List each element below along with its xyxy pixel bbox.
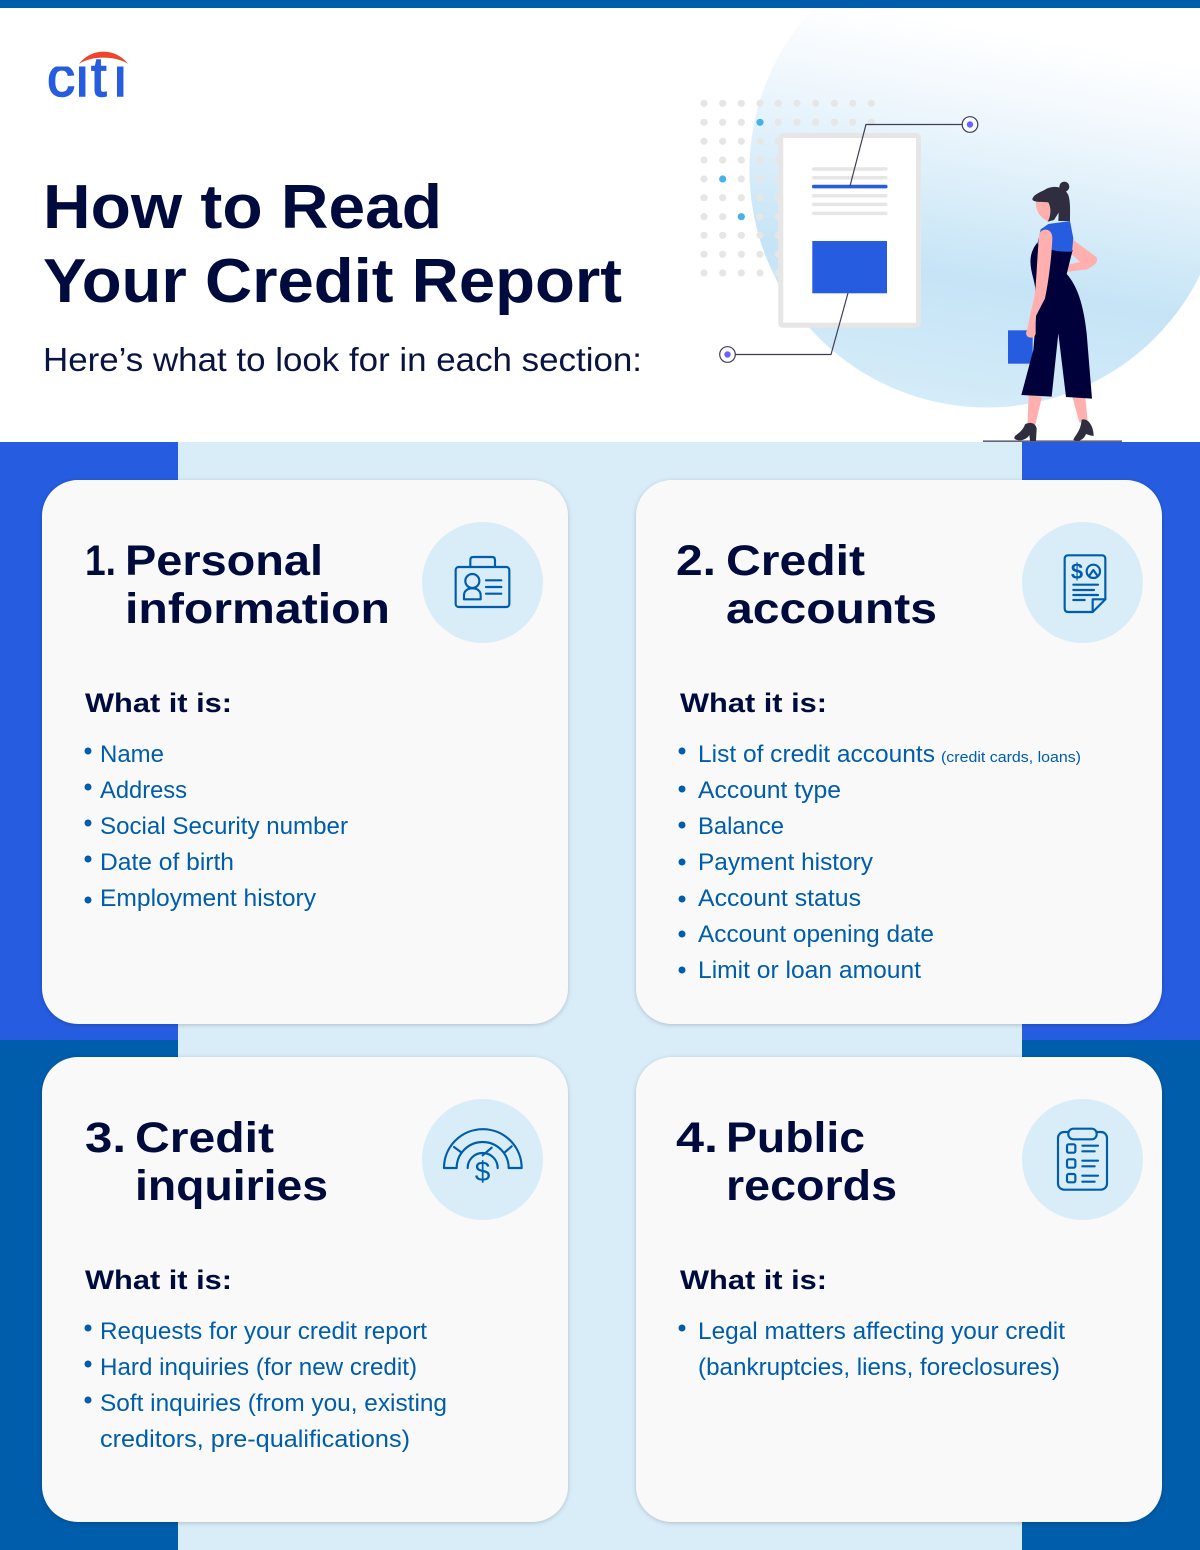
list: credit inquiry items: Requests for your credit report (100, 1318, 427, 1345)
panel: public records (636, 1057, 1162, 1522)
list: credit inquiry items: Soft inquiries (from you, existing (100, 1390, 447, 1417)
list: public record items (678, 1318, 1065, 1381)
list: credit account items: Account opening date (698, 921, 934, 948)
list: personal information items (84, 741, 348, 912)
list: public record items: (bankruptcies, liens, foreclosures) (698, 1354, 1060, 1381)
subheading: What it is: (680, 688, 827, 718)
list: credit inquiry items (84, 1318, 447, 1453)
illustration: woman reading report (700, 0, 1200, 442)
list: personal information items: Date of birth (100, 849, 234, 876)
woman (1008, 182, 1097, 441)
subheading: What it is: (85, 688, 232, 718)
list: credit account items: Balance (698, 813, 784, 840)
list: credit account items: List of credit accounts (698, 741, 935, 768)
subheading: What it is: (680, 1265, 827, 1295)
heading: credit accounts (676, 537, 937, 633)
background bands (0, 442, 1200, 1550)
heading: credit inquiries: 3. (85, 1114, 126, 1162)
panel: credit inquiries (42, 1057, 568, 1522)
heading: personal information: information (125, 585, 390, 633)
list: credit account items: (credit cards, loans) (941, 749, 1081, 766)
logo: citi: citi (47, 45, 126, 108)
heading: credit inquiries (85, 1114, 328, 1210)
list: credit account items: Limit or loan amount (698, 957, 921, 984)
heading: personal information: Personal (125, 537, 323, 585)
title: How to Read (43, 173, 442, 242)
list: credit account items: Account status (698, 885, 861, 912)
icon: id badge (422, 522, 543, 643)
list: personal information items: Employment history (100, 885, 317, 912)
heading: credit inquiries: Credit (135, 1114, 274, 1162)
panel: credit accounts (636, 480, 1162, 1024)
connectors (720, 117, 978, 362)
title (43, 173, 622, 316)
list: credit inquiry items: Hard inquiries (for new credit) (100, 1354, 417, 1381)
list: personal information items: Name (100, 741, 164, 768)
subheading: What it is: (85, 1265, 232, 1295)
list: public record items: Legal matters affecting your credit (698, 1318, 1065, 1345)
background circle (750, 0, 1200, 408)
heading: public records: 4. (676, 1114, 718, 1162)
heading: public records: records (726, 1162, 897, 1210)
top bar (0, 0, 1200, 8)
heading: personal information (85, 537, 390, 633)
dot grid (700, 100, 875, 277)
heading: credit accounts: 2. (676, 537, 716, 585)
icon: credit gauge: $ (475, 1156, 491, 1187)
heading: public records (676, 1114, 897, 1210)
title: Your Credit Report (43, 247, 622, 316)
icon: clipboard (1022, 1099, 1143, 1220)
list: credit inquiry items: creditors, pre-qualifications) (100, 1426, 410, 1453)
ground line (983, 440, 1122, 442)
document (781, 136, 918, 325)
list: personal information items: Address (100, 777, 187, 804)
heading: credit accounts: Credit (726, 537, 865, 585)
list: credit account items: Payment history (698, 849, 874, 876)
panel: personal information (42, 480, 568, 1024)
icon: credit gauge (422, 1099, 543, 1220)
heading: personal information: 1. (85, 537, 116, 585)
heading: public records: Public (726, 1114, 865, 1162)
icon: statement (1022, 522, 1143, 643)
heading: credit inquiries: inquiries (135, 1162, 328, 1210)
heading: credit accounts: accounts (726, 585, 937, 633)
list: credit account items (678, 741, 1081, 984)
list: credit account items: Account type (698, 777, 841, 804)
list: personal information items: Social Security number (100, 813, 348, 840)
subtitle: Here’s what to look for in each section: (43, 341, 642, 378)
icon: statement: $ (1071, 559, 1083, 584)
